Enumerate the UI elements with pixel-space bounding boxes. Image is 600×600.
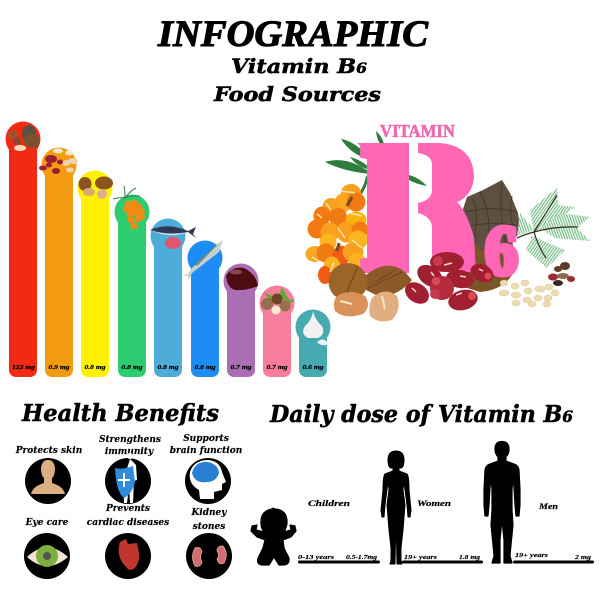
benefit: strengthens immunity: Strengthens (99, 435, 161, 445)
bar 7: 0.7 mg: 0.7 mg (230, 364, 252, 371)
benefit: brain function (170, 434, 242, 504)
dose: children: 0-13 years (298, 554, 335, 561)
benefit: eye care: Eye care (25, 518, 69, 528)
benefit: brain function: brain function (170, 446, 242, 456)
bar 9: 0.6 mg (296, 310, 332, 377)
bar 6: 0.8 mg (182, 240, 223, 377)
dose: women: 19+ years (404, 554, 438, 561)
bar 2: 0.9 mg: 0.9 mg (48, 364, 70, 371)
letter B: B (361, 105, 471, 310)
subtitle line 1: Vitamin B 6 (231, 54, 367, 78)
dose: women: 1.8 mg (459, 554, 481, 561)
dose: men (484, 442, 594, 564)
dose: men: 19+ years (515, 552, 549, 559)
brazil nuts (548, 262, 575, 286)
dose: children: 0.5-1.7mg (346, 554, 378, 561)
bar 3: 0.8 mg (78, 170, 113, 377)
heading: daily dose: Daily dose of Vitamin B6 (269, 401, 573, 428)
heading: health benefits: Health Benefits (21, 400, 219, 427)
bar 4: 0.8 mg (113, 186, 150, 377)
sea buckthorn berries (306, 184, 368, 284)
walnuts (328, 263, 412, 321)
benefit: brain function: Supports (183, 434, 229, 444)
bar 8: 0.7 mg: 0.7 mg (266, 364, 288, 371)
leaves (325, 131, 385, 194)
word VITAMIN: VITAMIN (380, 121, 455, 141)
pale seeds (499, 280, 559, 307)
icon: woman silhouette (381, 451, 411, 564)
dose: men: Men (538, 501, 558, 511)
dose: children: Children (308, 498, 350, 508)
bar chart: food sources (6, 122, 332, 377)
benefit: cardiac diseases (87, 504, 169, 579)
fern (517, 188, 590, 268)
pine cone (456, 180, 520, 292)
bar 4: 0.8 mg: 0.8 mg (122, 364, 143, 371)
bar 9: 0.6 mg: 0.6 mg (302, 364, 324, 371)
bar 6: 0.8 mg: 0.8 mg (194, 364, 216, 371)
bar 5: 0.8 mg (150, 218, 196, 377)
title: INFOGRAPHIC (157, 14, 429, 55)
icon: baby silhouette (251, 508, 296, 565)
bar 2: 0.9 mg (39, 148, 78, 377)
bar 7: 0.7 mg (224, 264, 258, 377)
bar 1: 122 mg (6, 122, 40, 377)
benefit: cardiac diseases: cardiac diseases (87, 518, 169, 528)
benefit: eye care (24, 518, 70, 579)
bar 5: 0.8 mg: 0.8 mg (158, 364, 179, 371)
dose: men: 2 mg (574, 554, 592, 561)
benefit: protects skin: Protects skin (15, 446, 82, 456)
benefit: kidney stones: Kidney (190, 508, 227, 518)
benefit: protects skin (15, 446, 82, 504)
bar 1: 122 mg: 122 mg (12, 364, 36, 371)
subtitle line 2: Food Sources (213, 82, 381, 106)
dose: women (381, 451, 483, 564)
bar 3: 0.8 mg: 0.8 mg (84, 364, 106, 371)
digit 6: 6 (485, 213, 518, 290)
bar 8: 0.7 mg (260, 286, 295, 377)
benefit: kidney stones: stones (193, 522, 225, 532)
benefit: kidney stones (186, 508, 232, 579)
benefit: cardiac diseases: Prevents (105, 504, 150, 514)
dose: children (251, 498, 380, 565)
icon: man silhouette (484, 442, 520, 563)
illustration: big vitamin B6 with foods (306, 105, 590, 321)
benefit: strengthens immunity: immunity (105, 447, 154, 457)
red beans (401, 252, 496, 314)
benefit: strengthens immunity (99, 435, 161, 504)
dose: women: Women (417, 498, 451, 508)
